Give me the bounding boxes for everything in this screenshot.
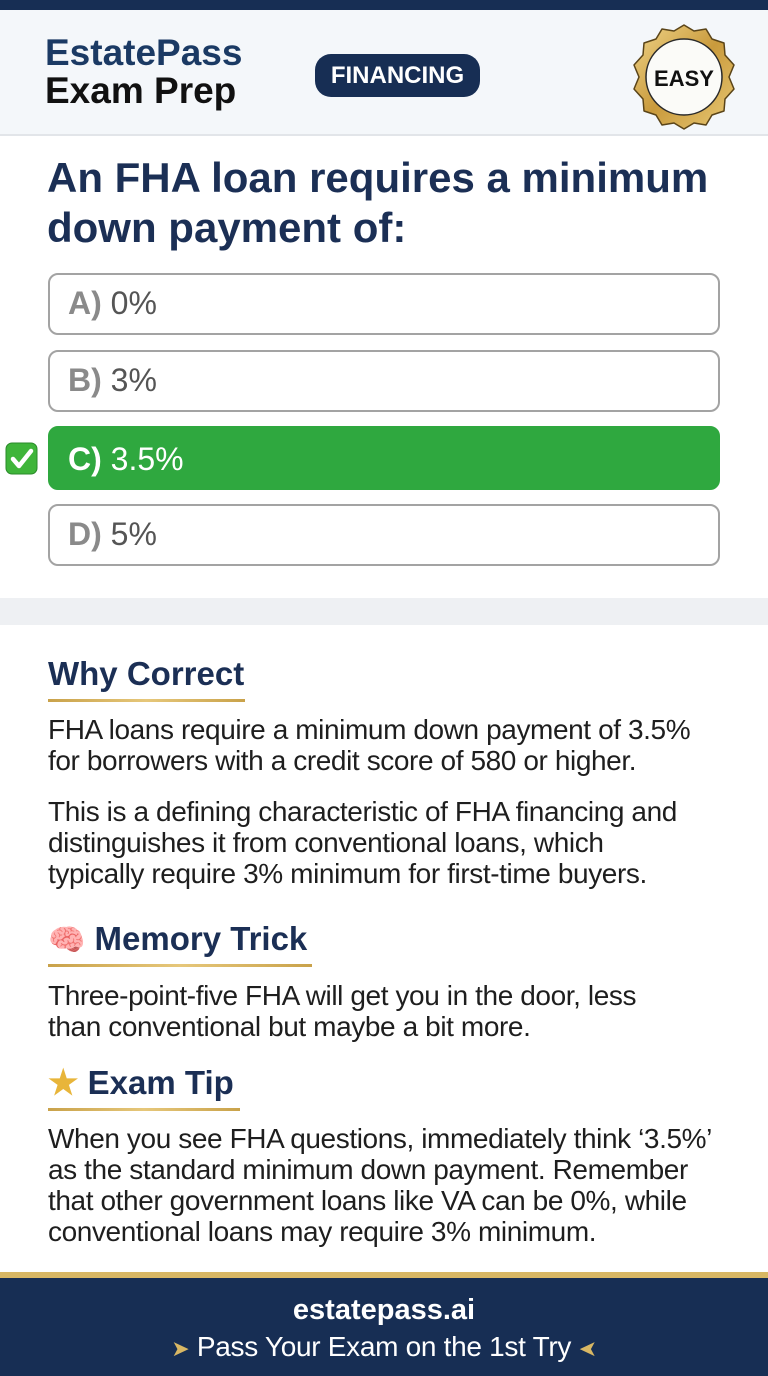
heading: exam tip: ★ Exam Tip xyxy=(48,1064,234,1102)
separator band xyxy=(0,598,768,625)
text: why correct: for borrowers with a credit score of 580 or higher. This is a defining characteristic of FHA financing and xyxy=(48,745,677,827)
option B: B) 3% xyxy=(68,362,157,398)
footer tagline: ➤ Pass Your Exam on the 1st Try xyxy=(171,1331,571,1362)
option D xyxy=(48,504,720,566)
text: exam tip: When you see FHA questions, immediately think ‘3.5%’ xyxy=(48,1123,712,1154)
option A xyxy=(48,273,720,335)
heading: memory trick: 🧠 Memory Trick xyxy=(48,920,307,957)
text: exam tip: as the standard minimum down payment. Remember xyxy=(48,1154,688,1185)
text: why correct xyxy=(48,714,690,889)
difficulty badge xyxy=(633,24,735,130)
header panel xyxy=(0,10,768,136)
logo: Exam Prep xyxy=(45,70,236,111)
text: why correct: typically require 3% minimum for first-time buyers. xyxy=(48,858,647,889)
text: exam tip: that other government loans like VA can be 0%, while xyxy=(48,1185,687,1216)
footer xyxy=(0,1272,768,1376)
text: why correct: FHA loans require a minimum down payment of 3.5% xyxy=(48,714,690,745)
text: memory trick: than conventional but maybe a bit more. xyxy=(48,1011,530,1042)
question title: An FHA loan requires a minimum down payment of: xyxy=(47,154,708,251)
text: why correct: distinguishes it from conventional loans, which xyxy=(48,827,604,858)
heading: why correct: Why Correct xyxy=(48,655,244,692)
difficulty badge: EASY xyxy=(654,66,714,91)
option C correct xyxy=(48,426,720,490)
text: memory trick: Three-point-five FHA will get you in the door, less xyxy=(48,980,636,1011)
option B xyxy=(48,350,720,412)
category pill xyxy=(315,54,480,97)
logo: EstatePass xyxy=(45,32,242,73)
option D: D) 5% xyxy=(68,516,157,552)
icon: check xyxy=(6,442,38,474)
text: exam tip xyxy=(48,1123,712,1247)
footer url: estatepass.ai xyxy=(293,1294,475,1326)
option A: A) 0% xyxy=(68,285,157,321)
footer tagline: ➤ xyxy=(579,1336,597,1361)
top bar xyxy=(0,0,768,10)
text: memory trick xyxy=(48,980,636,1042)
text: exam tip: conventional loans may require 3% minimum. xyxy=(48,1216,596,1247)
logo xyxy=(45,32,242,111)
category pill: FINANCING xyxy=(331,62,464,89)
option C correct: C) 3.5% xyxy=(68,441,184,477)
